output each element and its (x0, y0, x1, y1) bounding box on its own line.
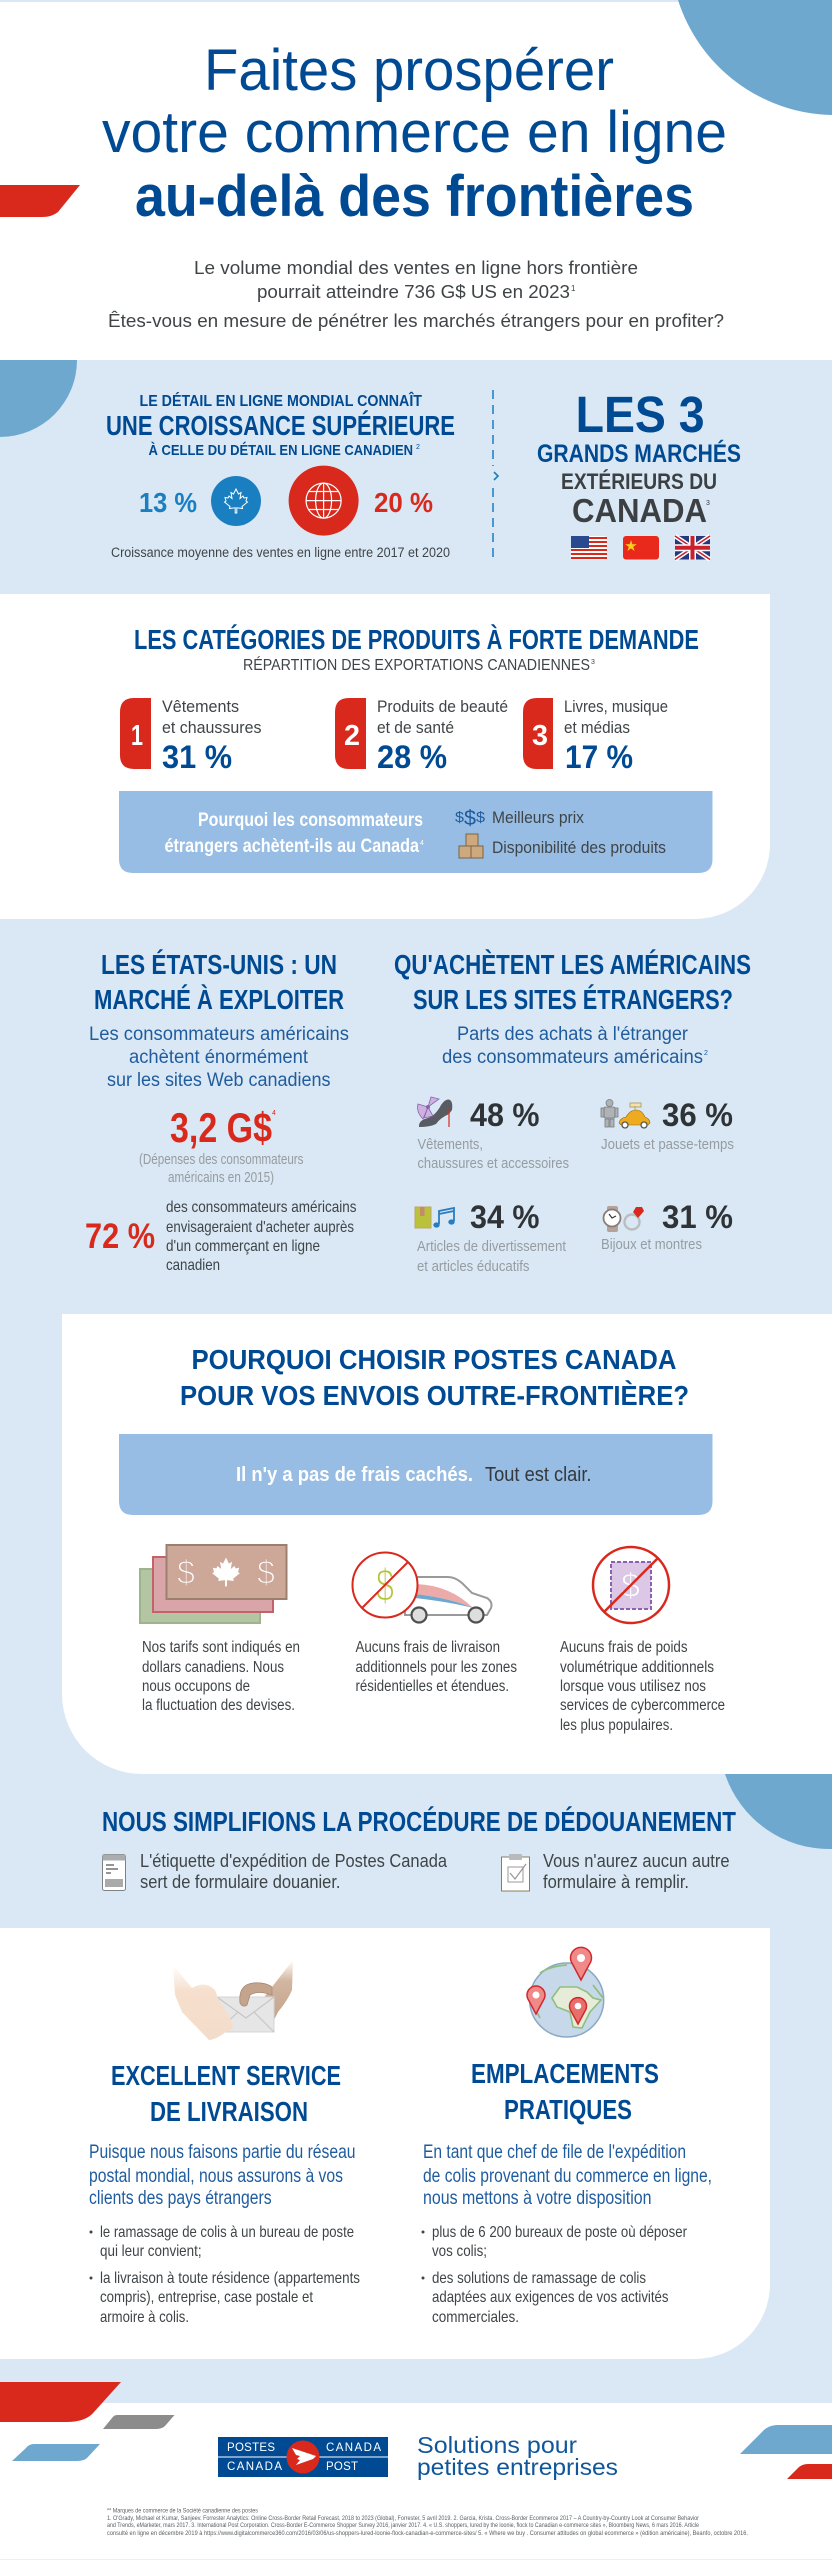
panel: what Americans buy (394, 949, 751, 1275)
stat: 3,2 G$: 4 (272, 1110, 276, 1117)
category 3: 17 % (565, 739, 633, 775)
text: shipping label (140, 1851, 448, 1892)
stat: 72 % (85, 1199, 356, 1274)
text: US consumers (89, 1024, 349, 1091)
list: delivery bullets (90, 2224, 360, 2326)
text: leader in parcels: En tant que chef de file de l'expédition (423, 2142, 686, 2163)
panel: high-demand categories (0, 594, 770, 919)
heading: what Americans buy: SUR LES SITES ÉTRANGERS? (413, 984, 733, 1015)
panel: the United States market (85, 949, 356, 1274)
column: convenient locations (422, 1947, 712, 2326)
tagline: Solutions pour (417, 2432, 577, 2458)
column: no dimensional weight fees: lorsque vous utilisez nos (560, 1678, 706, 1695)
icon: dollar signs: $ (476, 809, 486, 826)
text: leader in parcels (423, 2142, 712, 2209)
logo: Canada Post: POSTES (227, 2442, 275, 2454)
heading: excellent delivery service: DE LIVRAISON (150, 2096, 308, 2127)
icon: book and music note (415, 1207, 455, 1228)
footnotes (107, 2508, 748, 2537)
column: rates in Canadian dollars: nous occupons de (142, 1678, 250, 1695)
tagline: petites entreprises (417, 2454, 618, 2480)
logo: Canada Post: CANADA (227, 2461, 282, 2473)
column: no residential delivery fees (352, 1552, 517, 1695)
item: entertainment 34 % (415, 1199, 567, 1275)
text: postal network: Puisque nous faisons partie du réseau (89, 2142, 356, 2163)
logo: Canada Post: CANADA (326, 2442, 381, 2454)
column: rates in Canadian dollars: la fluctuation des devises. (142, 1697, 295, 1714)
column: no dimensional weight fees: les plus populaires. (560, 1717, 673, 1734)
category 1 (120, 697, 262, 775)
intro text: 1 (571, 284, 576, 293)
intro text: Le volume mondial des ventes en ligne hors frontière (194, 258, 638, 278)
callout: why foreign consumers buy in Canada: étrangers achètent-ils au Canada (164, 835, 419, 857)
title (102, 38, 727, 229)
footnotes: and Trends, eMarketer, mars 2017. 3. International Post Corporation. Cross-Border E-Commerce Shopper Survey 2016, janvier 2017. 4. « U.S. shoppers, lured by the loonie, flock to Canadian e-commerce sites », Bloomberg News, 6 mars 2016. Article (107, 2522, 699, 2529)
column: rates in Canadian dollars: Nos tarifs sont indiqués en (142, 1639, 300, 1656)
panel: delivery and locations (0, 1928, 770, 2359)
intro text: Êtes-vous en mesure de pénétrer les marchés étrangers pour en profiter? (108, 311, 724, 331)
item: jewellery 31 % (601, 1199, 733, 1253)
icon: clipboard (502, 1854, 530, 1891)
icon: banknotes: $ (177, 1554, 195, 1592)
red swoosh: footer left (0, 2382, 121, 2422)
decorative quarter circle: growth section (0, 360, 77, 437)
panel: customs clearance (102, 1806, 736, 1892)
icon: dollar signs (455, 807, 486, 830)
callout: why foreign consumers buy in Canada (119, 791, 712, 873)
stat: world 20 %: 20 % (374, 487, 433, 518)
list: locations bullets: des solutions de ramassage de colis (432, 2270, 646, 2287)
stat: 72 %: d'un commerçant en ligne (166, 1238, 320, 1255)
stat: 3,2 G$: (Dépenses des consommateurs (139, 1151, 304, 1168)
stat: Canada 13 %: 13 % (139, 487, 197, 518)
text: share of purchases: des consommateurs américains (442, 1047, 703, 1068)
item: entertainment 34 %: Articles de divertissement (417, 1238, 567, 1255)
category 1: et chaussures (162, 718, 262, 737)
panel: why choose Canada Post (62, 1314, 832, 1774)
list: locations bullets (422, 2224, 688, 2326)
icon: crossed-out stamp (593, 1547, 669, 1623)
item: clothing 48 %: chaussures et accessoires (418, 1155, 569, 1172)
text: shipping label: L'étiquette d'expédition de Postes Canada (140, 1851, 448, 1871)
heading: convenient locations (471, 2058, 659, 2125)
list: locations bullets: vos colis; (432, 2243, 487, 2260)
icon: crossed-out stamp: $ (621, 1567, 640, 1605)
icon: crossed-out dollar and car: $ (376, 1559, 394, 1611)
heading: growth (106, 391, 455, 459)
divider arrow (493, 390, 498, 562)
item: clothing 48 %: Vêtements, (418, 1136, 483, 1153)
icon: China flag (623, 536, 659, 560)
grey swoosh (103, 2415, 174, 2429)
title: Faites prospérer (204, 38, 614, 103)
footer (0, 2382, 832, 2560)
category 2: 2 (344, 720, 360, 752)
heading: categories (134, 624, 699, 674)
red swoosh: right (787, 2464, 832, 2479)
list: delivery bullets: la livraison à toute résidence (appartements (100, 2270, 360, 2287)
decorative circle: customs section (725, 1774, 832, 1849)
heading: growth: 2 (416, 444, 420, 451)
column: no dimensional weight fees: services de cybercommerce (560, 1697, 725, 1714)
column: rates in Canadian dollars: dollars canadiens. Nous (142, 1659, 284, 1676)
icon: boxes (459, 834, 483, 858)
heading: growth: UNE CROISSANCE SUPÉRIEURE (106, 410, 455, 441)
stat: 72 %: canadien (166, 1257, 220, 1274)
icon: dollar signs: $ (455, 809, 465, 826)
callout: why foreign consumers buy in Canada: Disponibilité des produits (492, 838, 666, 857)
callout: why foreign consumers buy in Canada: Meilleurs prix (492, 808, 584, 827)
text: postal network: postal mondial, nous assurons à vos (89, 2166, 343, 2187)
icon: maple leaf (211, 476, 261, 526)
panel: top 3 markets (537, 386, 741, 560)
text: shipping label: sert de formulaire douanier. (140, 1872, 340, 1892)
heading: excellent delivery service (111, 2060, 341, 2127)
icon: globe (289, 466, 359, 536)
icon: globe with pins (527, 1947, 604, 2037)
text: share of purchases: Parts des achats à l'étranger (457, 1024, 689, 1045)
column: no residential delivery fees: résidentielles et étendues. (356, 1678, 509, 1695)
text: postal network: clients des pays étrangers (89, 2188, 272, 2209)
icon: robot and toy car (601, 1100, 650, 1128)
logo: Canada Post: POST (326, 2461, 358, 2473)
decorative corner circle: top right (678, 0, 832, 115)
text: no other form: Vous n'aurez aucun autre (543, 1851, 730, 1871)
column: no residential delivery fees: additionnels pour les zones (356, 1659, 517, 1676)
list: locations bullets: adaptées aux exigences de vos activités (432, 2289, 668, 2306)
heading: top 3 markets (537, 386, 741, 529)
text: leader in parcels: de colis provenant du commerce en ligne, (423, 2166, 712, 2187)
column: no dimensional weight fees: volumétrique additionnels (560, 1659, 714, 1676)
text: share of purchases: 2 (704, 1050, 708, 1057)
list: delivery bullets: armoire à colis. (100, 2309, 189, 2326)
icon: banknotes: $ (257, 1554, 275, 1592)
heading: excellent delivery service: EXCELLENT SERVICE (111, 2060, 341, 2091)
intro text (108, 258, 724, 331)
text: leader in parcels: nous mettons à votre disposition (423, 2188, 652, 2209)
column: rates in Canadian dollars (140, 1545, 300, 1714)
category 3: et médias (564, 718, 630, 737)
text: US consumers: Les consommateurs américains (89, 1024, 349, 1045)
heading: why choose Canada Post: POUR VOS ENVOIS OUTRE-FRONTIÈRE? (180, 1380, 689, 1411)
list: delivery bullets: le ramassage de colis à un bureau de poste (100, 2224, 354, 2241)
column: excellent delivery service (89, 1960, 360, 2326)
category 3: 3 (532, 720, 548, 752)
callout: no hidden fees (119, 1434, 712, 1515)
icon: hands and envelope (173, 1960, 293, 2040)
category 3: Livres, musique (564, 697, 668, 716)
item: entertainment 34 %: 34 % (470, 1199, 540, 1235)
panel: online retail growth (106, 391, 455, 560)
icon: US flag (571, 536, 607, 560)
heading: growth: LE DÉTAIL EN LIGNE MONDIAL CONNAÎT (140, 391, 422, 410)
item: entertainment 34 %: et articles éducatifs (417, 1258, 530, 1275)
list: locations bullets: commerciales. (432, 2309, 519, 2326)
stat: 72 %: envisageraient d'acheter auprès (166, 1219, 354, 1236)
item: toys 36 % (601, 1097, 734, 1153)
callout: no hidden fees: Tout est clair. (485, 1464, 592, 1486)
stat: 3,2 G$: américains en 2015) (168, 1169, 274, 1186)
heading: top 3 markets: EXTÉRIEURS DU (561, 469, 717, 494)
stat: 72 %: des consommateurs américains (166, 1199, 356, 1216)
icon: shipping label (102, 1854, 126, 1890)
heading: US market: LES ÉTATS-UNIS : UN (101, 949, 337, 980)
stat: 3,2 G$ (139, 1104, 304, 1186)
icon: watch and ring (604, 1206, 644, 1232)
intro text: pourrait atteindre 736 G$ US en 2023 (257, 282, 570, 302)
heading: convenient locations: EMPLACEMENTS (471, 2058, 659, 2089)
logo: Canada Post (218, 2437, 388, 2477)
heading: why choose Canada Post (180, 1344, 689, 1411)
heading: what Americans buy (394, 949, 751, 1015)
icon: high heel with bow (418, 1097, 452, 1127)
item: jewellery 31 %: Bijoux et montres (601, 1236, 702, 1253)
category 2: Produits de beauté (377, 697, 508, 716)
heading: top 3 markets: CANADA (572, 492, 707, 529)
column: no dimensional weight fees (560, 1547, 725, 1734)
blue swoosh: right (740, 2425, 832, 2454)
heading: US market (94, 949, 344, 1015)
text: US consumers: sur les sites Web canadiens (107, 1070, 330, 1091)
icon: banknotes (140, 1545, 286, 1623)
category 2: 28 % (377, 739, 447, 775)
heading: categories: RÉPARTITION DES EXPORTATIONS CANADIENNES (243, 657, 590, 674)
heading: categories: 3 (591, 659, 595, 666)
stat: 72 %: 72 % (85, 1217, 155, 1256)
heading: top 3 markets: GRANDS MARCHÉS (537, 439, 741, 468)
icon: dollar signs: $ (464, 807, 476, 830)
heading: top 3 markets: 3 (706, 500, 710, 507)
icon: crossed-out dollar and car (352, 1552, 492, 1622)
title: votre commerce en ligne (102, 100, 727, 165)
light blue swoosh (12, 2444, 100, 2461)
text: no other form: formulaire à remplir. (543, 1872, 689, 1892)
heading: US market: MARCHÉ À EXPLOITER (94, 984, 344, 1015)
heading: what Americans buy: QU'ACHÈTENT LES AMÉRICAINS (394, 949, 751, 980)
text: postal network (89, 2142, 356, 2209)
list: delivery bullets: compris), entreprise, case postale et (100, 2289, 313, 2306)
category 2 (335, 697, 508, 775)
column: no residential delivery fees: Aucuns frais de livraison (356, 1639, 500, 1656)
footnotes: 1. O'Grady, Michael et Kumar, Sanjeev. Forrester Analytics: Online Cross-Border Retail Forecast, 2018 to 2023 (Global), Forrester, 5 avril 2019. 2. Garcia, Krista. Cross-Border Ecommerce 2017 – A Country-by-Country Look at Consumer Behavior (107, 2515, 700, 2522)
item: toys 36 %: Jouets et passe-temps (601, 1136, 734, 1153)
callout: why foreign consumers buy in Canada: Pourquoi les consommateurs (198, 809, 423, 831)
list: locations bullets: plus de 6 200 bureaux de poste où déposer (432, 2224, 688, 2241)
text: share of purchases (442, 1024, 708, 1068)
list: delivery bullets: qui leur convient; (100, 2243, 202, 2260)
callout: no hidden fees: Il n'y a pas de frais cachés. (236, 1464, 473, 1486)
title: au-delà des frontières (135, 164, 694, 229)
stat: 3,2 G$: 3,2 G$ (170, 1104, 272, 1151)
heading: convenient locations: PRATIQUES (504, 2094, 632, 2125)
heading: growth: À CELLE DU DÉTAIL EN LIGNE CANADIEN (148, 442, 413, 459)
item: jewellery 31 %: 31 % (662, 1199, 733, 1235)
item: clothing 48 % (418, 1097, 569, 1172)
red swoosh: header left (0, 185, 80, 217)
category 1: Vêtements (162, 697, 239, 716)
heading: why choose Canada Post: POURQUOI CHOISIR POSTES CANADA (192, 1344, 676, 1375)
heading: top 3 markets: LES 3 (576, 386, 705, 443)
text: US consumers: achètent énormément (129, 1047, 309, 1068)
item: clothing 48 %: 48 % (470, 1097, 540, 1133)
caption: growth: Croissance moyenne des ventes en ligne entre 2017 et 2020 (111, 545, 450, 560)
column: no dimensional weight fees: Aucuns frais de poids (560, 1639, 688, 1656)
category 1: 31 % (162, 739, 232, 775)
icon: UK flag (675, 536, 710, 560)
item: toys 36 %: 36 % (662, 1097, 733, 1133)
tagline (417, 2432, 618, 2480)
category 1: 1 (131, 720, 143, 752)
category 3 (523, 697, 668, 775)
footnotes: ** Marques de commerce de la Société canadienne des postes (107, 2508, 259, 2515)
category 2: et de santé (377, 718, 454, 737)
callout: why foreign consumers buy in Canada: 4 (420, 840, 424, 847)
text: no other form (543, 1851, 730, 1892)
